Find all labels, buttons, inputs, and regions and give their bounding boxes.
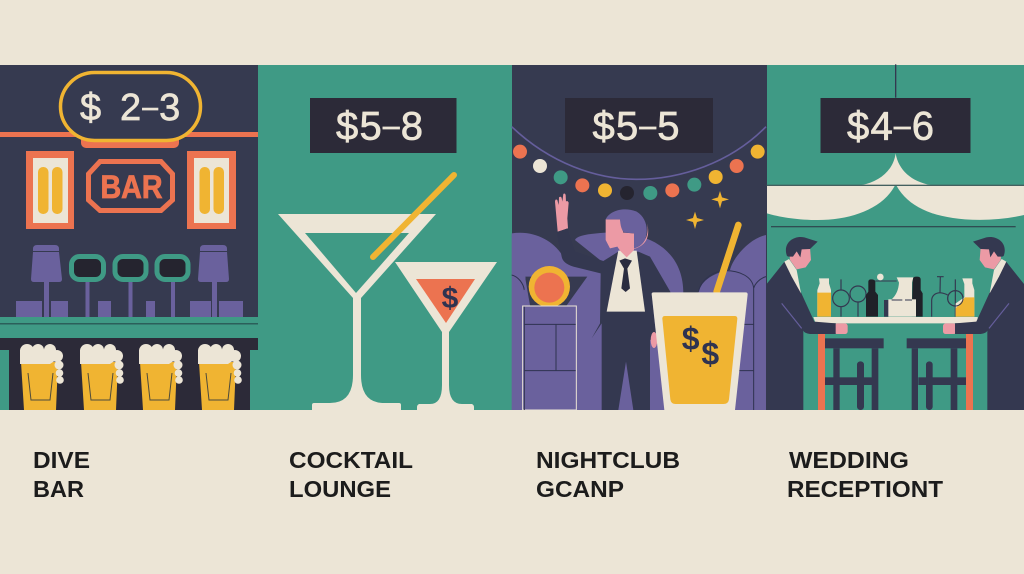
table legs and stools (818, 334, 973, 410)
label: cocktail lounge: LOUNGE (289, 476, 391, 502)
price badge: wedding reception: $4 (847, 104, 894, 148)
icon: right window (187, 151, 236, 229)
price badge: dive bar (60, 72, 200, 140)
bar sign: BAR (100, 169, 162, 205)
price badge: cocktail lounge (310, 98, 456, 153)
icon: beer mug 1 (20, 344, 64, 410)
light string (512, 127, 766, 200)
label: cocktail lounge (289, 447, 413, 502)
price badge: dive bar: – (142, 91, 159, 122)
bar back shelf with lamps and screens (16, 245, 243, 318)
price badge: wedding reception: 6 (912, 104, 935, 148)
label: wedding reception: WEDDING (789, 447, 909, 473)
price badge: dive bar: $ (80, 87, 102, 129)
price badge: cocktail lounge: 8 (401, 104, 424, 148)
price badge: nightclub: $5 (592, 104, 639, 148)
icon: beer mug 4 (198, 344, 242, 410)
panel: wedding reception (767, 64, 1024, 410)
label: nightclub (536, 447, 680, 502)
icon: sparkles (686, 191, 729, 229)
price badge: dive bar: 2 (120, 87, 142, 129)
label: wedding reception: RECEPTIONT (787, 476, 944, 502)
label: nightclub: NIGHTCLUB (536, 447, 680, 473)
price badge: nightclub: – (639, 110, 657, 142)
label: wedding reception (787, 447, 944, 502)
icon: small martini glass (395, 262, 497, 410)
icon: beer mug 3 (139, 344, 183, 410)
icon: tall drink with dollars: $ (682, 320, 700, 356)
table setting (813, 274, 978, 323)
price badge: nightclub (565, 98, 713, 153)
label: dive bar: BAR (33, 476, 84, 502)
icon: large martini glass (278, 175, 454, 410)
icon: small martini glass: $ (442, 282, 459, 315)
icon: left window (26, 151, 74, 229)
figure: right guest (943, 237, 1024, 410)
price badge: nightclub: 5 (657, 104, 681, 148)
price badge: cocktail lounge: – (383, 110, 401, 142)
bar counter (0, 317, 258, 410)
label: cocktail lounge: COCKTAIL (289, 447, 413, 473)
plinth with lamp (523, 266, 587, 410)
price badge: cocktail lounge: $5 (336, 104, 383, 148)
figure: left guest (767, 237, 848, 410)
panel: dive bar (0, 65, 258, 410)
panel: nightclub (512, 65, 767, 410)
panel: cocktail lounge (258, 65, 512, 410)
icon: beer mug 2 (80, 344, 124, 410)
price badge: wedding reception (820, 98, 970, 153)
icon: tall drink with dollars (652, 225, 748, 410)
label: nightclub: GCANP (536, 476, 624, 502)
label: dive bar (33, 447, 90, 502)
figure: nightclub patron (555, 194, 671, 410)
price badge: wedding reception: – (894, 110, 912, 142)
label: dive bar: DIVE (33, 447, 90, 473)
bar sign (88, 162, 172, 210)
price badge: dive bar: 3 (159, 87, 181, 129)
drapes (767, 153, 1024, 227)
icon: tall drink with dollars: $ (701, 336, 719, 372)
